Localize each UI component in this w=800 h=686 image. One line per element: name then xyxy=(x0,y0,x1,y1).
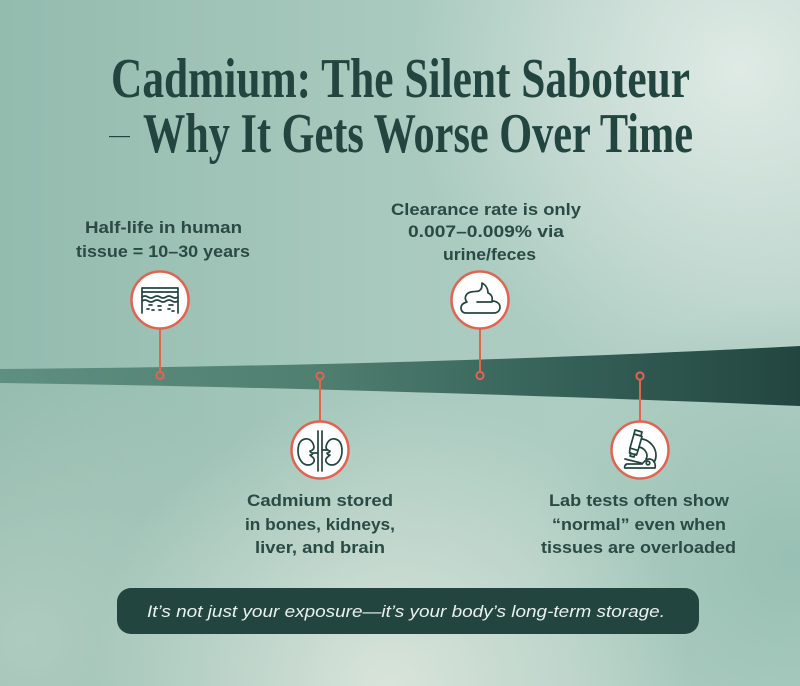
milestone: storage xyxy=(245,372,395,557)
lab tests text xyxy=(541,492,736,557)
connector xyxy=(156,328,164,379)
half-life text xyxy=(76,219,250,261)
milestone: clearance rate xyxy=(391,201,582,379)
lab tests text: Lab tests often show xyxy=(549,492,729,510)
milestone: half-life xyxy=(76,219,250,379)
storage text: liver, and brain xyxy=(255,539,385,557)
icon: microscope xyxy=(612,422,668,478)
clearance text xyxy=(391,201,582,264)
storage text: in bones, kidneys, xyxy=(245,516,395,534)
connector xyxy=(316,372,324,422)
callout xyxy=(117,588,699,634)
milestone: lab tests xyxy=(541,372,736,557)
connector xyxy=(476,328,484,379)
half-life text: tissue = 10–30 years xyxy=(76,243,250,261)
icon: stool xyxy=(452,272,508,328)
clearance text: urine/feces xyxy=(443,246,536,264)
icon: kidneys xyxy=(292,422,348,478)
timeline band xyxy=(0,346,800,406)
storage text: Cadmium stored xyxy=(247,492,393,510)
lab tests text: tissues are overloaded xyxy=(541,539,736,557)
half-life text: Half-life in human xyxy=(85,219,242,237)
connector xyxy=(636,372,644,422)
lab tests text: “normal” even when xyxy=(552,516,726,534)
clearance text: Clearance rate is only xyxy=(391,201,582,219)
clearance text: 0.007–0.009% via xyxy=(408,223,565,241)
title xyxy=(109,48,693,165)
callout: It’s not just your exposure—it’s your body’s long-term storage. xyxy=(147,603,665,621)
icon: tissue layers xyxy=(132,272,188,328)
storage text xyxy=(245,492,395,557)
